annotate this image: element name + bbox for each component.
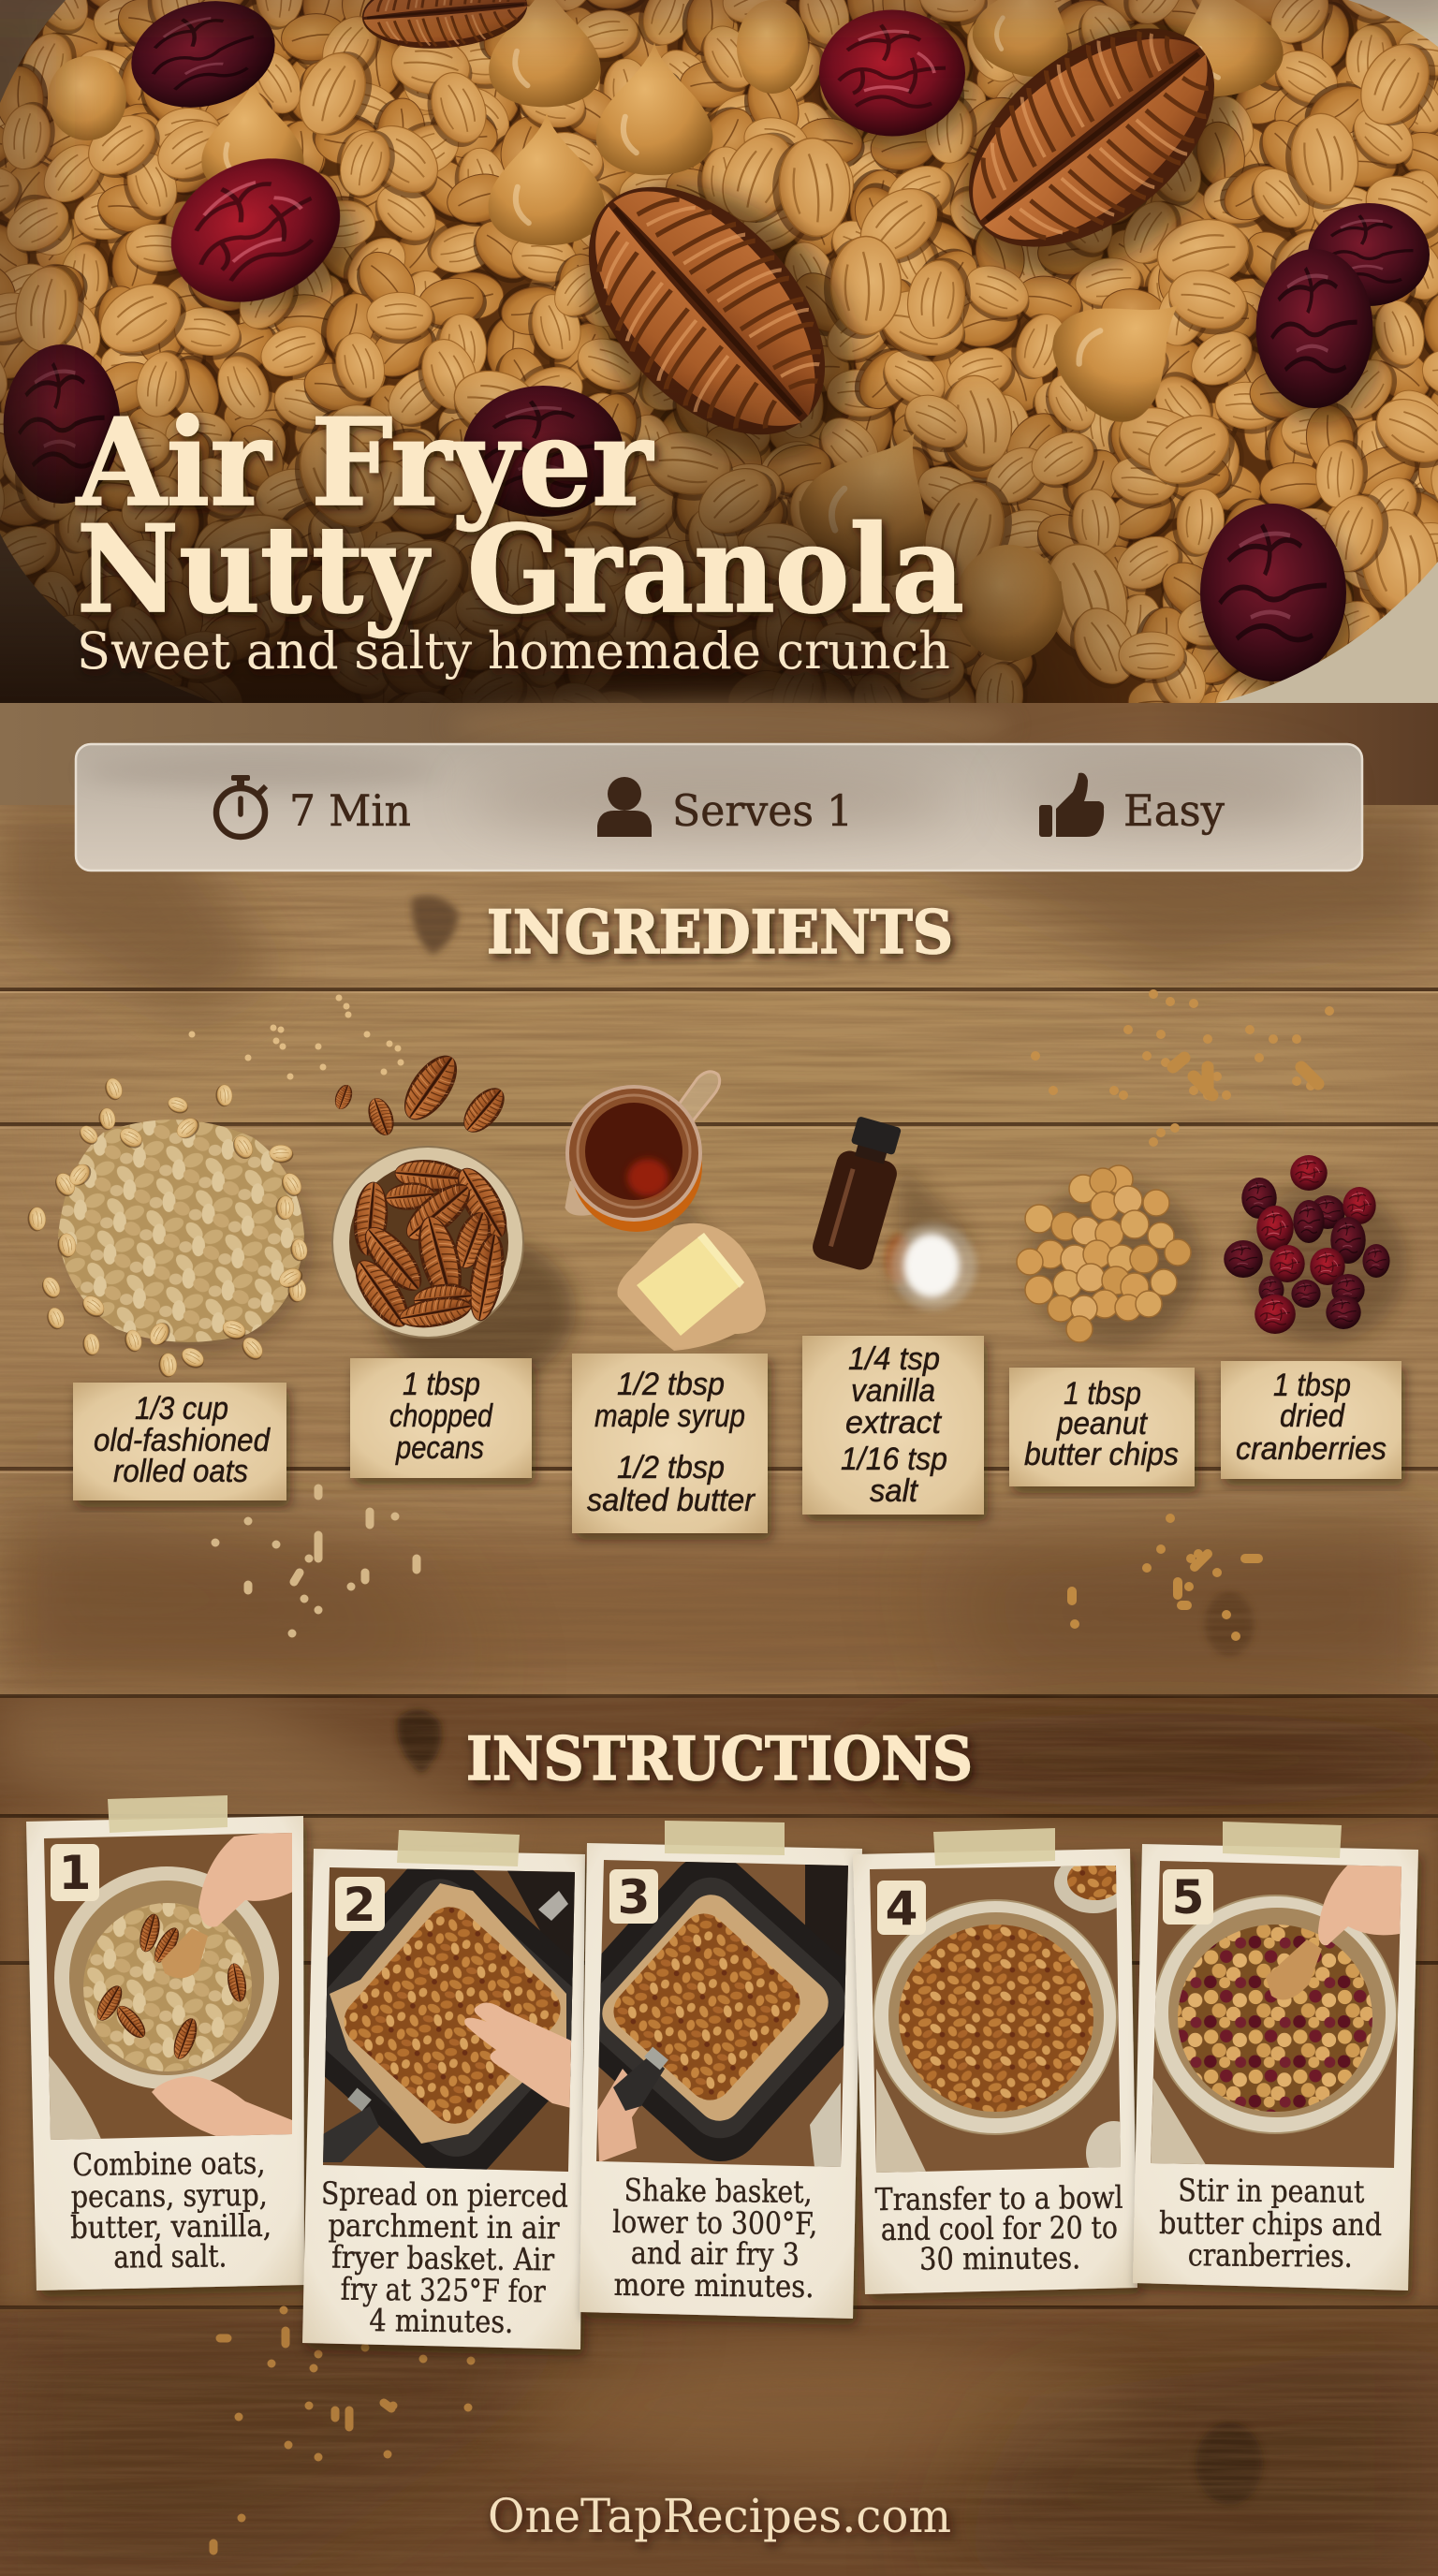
- oat bed: [0, 0, 1438, 703]
- badge: 1: 1: [59, 1846, 91, 1900]
- badge: 4: 4: [886, 1881, 917, 1936]
- ingredient: vanilla bottle: [810, 1114, 974, 1310]
- ingredient card: vanilla and salt: vanilla: [851, 1373, 935, 1409]
- step 5 text: butter chips and: [1159, 2204, 1382, 2243]
- badge: 2: 2: [344, 1878, 375, 1932]
- badge: 4: [877, 1881, 926, 1936]
- step 4 card: [853, 1828, 1142, 2294]
- ingredient card: vanilla and salt: [802, 1336, 984, 1515]
- step 3 card: [544, 1821, 887, 2319]
- ingredient card: syrup and butter: 1/2 tbsp: [617, 1450, 725, 1486]
- edge vignette: [0, 0, 1438, 524]
- step 3 text: Shake basket,: [624, 2172, 813, 2210]
- badge: 5: [1163, 1869, 1213, 1925]
- step 4 text: and cool for 20 to: [881, 2209, 1118, 2247]
- heading: instructions: INSTRUCTIONS: [466, 1724, 973, 1794]
- ingredient: peanut butter chips: [1017, 1165, 1202, 1346]
- heading: ingredients: INGREDIENTS: [487, 898, 953, 968]
- stats bar: [76, 744, 1362, 871]
- step 4 text: Transfer to a bowl: [874, 2179, 1123, 2217]
- step 1 photo: [37, 1825, 300, 2144]
- wood background: instructions: [0, 1696, 1438, 2576]
- ingredient card: vanilla and salt: 1/4 tsp: [848, 1341, 940, 1377]
- ingredient card: syrup and butter: 1/2 tbsp: [617, 1367, 725, 1402]
- step 5 photo: [1147, 1858, 1404, 2172]
- tape: [397, 1830, 520, 1866]
- blurred band: [0, 697, 1438, 805]
- badge: 5: 5: [1172, 1870, 1204, 1925]
- ingredient: rolled oats: [26, 1076, 314, 1378]
- ingredient card: oats: old-fashioned: [94, 1423, 271, 1458]
- ingredient card: peanut butter chips: peanut: [1056, 1406, 1148, 1442]
- pecans: [360, 0, 1255, 479]
- ingredient: butter: [617, 1223, 766, 1351]
- step 1 text: and salt.: [113, 2237, 227, 2276]
- ingredient: salt: [886, 1223, 976, 1310]
- title: Air Fryer: [76, 393, 654, 534]
- step 3 text: lower to 300°F,: [612, 2203, 817, 2242]
- ingredient card: pecans: 1 tbsp: [403, 1367, 480, 1402]
- ingredient card: peanut butter chips: butter chips: [1024, 1437, 1179, 1472]
- ingredient card: vanilla and salt: extract: [845, 1405, 943, 1441]
- step 1 text: Combine oats,: [72, 2144, 266, 2183]
- step 2 text: [319, 2174, 568, 2341]
- tape: [933, 1828, 1055, 1866]
- step 2 text: parchment in air: [328, 2207, 560, 2247]
- step 4 text: 30 minutes.: [919, 2239, 1080, 2277]
- icon: stopwatch: [216, 775, 266, 837]
- step 1 text: [69, 2144, 272, 2276]
- step 1 text: butter, vanilla,: [70, 2207, 271, 2246]
- step 4 text: [874, 2179, 1123, 2277]
- ingredient card: pecans: pecans: [395, 1430, 484, 1466]
- ingredient: pecan bowl: [331, 1046, 576, 1385]
- ingredient card: syrup and butter: maple syrup: [594, 1398, 745, 1434]
- footer website: OneTapRecipes.com: [488, 2489, 951, 2543]
- tape: [108, 1795, 227, 1833]
- ingredient card: oats: 1/3 cup: [135, 1391, 228, 1427]
- wood grain: [0, 805, 1438, 2576]
- badge: 3: [609, 1869, 658, 1925]
- tape: [665, 1821, 785, 1855]
- step 5 text: Stir in peanut: [1178, 2172, 1365, 2210]
- hero photo of granola: [0, 0, 1438, 703]
- step 3 text: more minutes.: [613, 2266, 814, 2305]
- step 5 card: [1133, 1822, 1418, 2291]
- ingredient card: oats: rolled oats: [113, 1454, 248, 1489]
- dark overlay behind title: [0, 374, 1438, 704]
- stat: difficulty: Easy: [1123, 785, 1225, 836]
- stat: servings: Serves 1: [672, 785, 853, 836]
- ingredient card: peanut butter chips: [1009, 1368, 1195, 1486]
- ingredient card: pecans: [350, 1358, 532, 1478]
- wood background: ingredients: [0, 805, 1438, 1696]
- ingredient card: oats: [73, 1383, 286, 1500]
- badge: 3: 3: [618, 1870, 650, 1925]
- ingredient card: cranberries: dried: [1280, 1398, 1345, 1434]
- title: Nutty Granola: [77, 500, 964, 640]
- step 3 text: [611, 2172, 818, 2305]
- step 3 photo: [544, 1837, 887, 2179]
- ingredient card: cranberries: cranberries: [1236, 1431, 1387, 1467]
- tape: [1223, 1822, 1342, 1858]
- icon: person: [597, 777, 652, 837]
- step 1 text: pecans, syrup,: [71, 2176, 268, 2215]
- step 2 text: fryer basket. Air: [331, 2239, 555, 2277]
- crumbs scattered: [192, 994, 1329, 2551]
- step 2 photo: [267, 1837, 629, 2199]
- step 5 text: cranberries.: [1188, 2236, 1353, 2275]
- step 2 text: 4 minutes.: [369, 2302, 514, 2340]
- ingredient: dried cranberries: [1224, 1155, 1407, 1343]
- cranberries: [4, 0, 1430, 681]
- warm tone overlay: [0, 0, 1438, 703]
- badge: 1: [51, 1844, 99, 1901]
- step 2 text: fry at 325°F for: [341, 2271, 546, 2309]
- ingredient card: cranberries: [1221, 1361, 1401, 1479]
- stat: time: 7 Min: [289, 785, 411, 836]
- icon: thumbs up: [1039, 773, 1104, 837]
- ingredient card: syrup and butter: [572, 1354, 768, 1533]
- ingredient card: vanilla and salt: salt: [870, 1473, 918, 1509]
- step 1 card: [26, 1795, 304, 2291]
- step 4 photo: [866, 1853, 1142, 2185]
- title: [76, 393, 964, 640]
- ingredient card: syrup and butter: salted butter: [587, 1483, 756, 1518]
- step 2 card: [267, 1830, 629, 2349]
- ingredient card: pecans: chopped: [389, 1398, 493, 1434]
- peanut butter chips: [48, 0, 1291, 661]
- ingredient card: vanilla and salt: 1/16 tsp: [841, 1442, 947, 1477]
- subtitle: Sweet and salty homemade crunch: [77, 622, 950, 681]
- ingredient card: cranberries: 1 tbsp: [1273, 1368, 1351, 1403]
- ingredient card: peanut butter chips: 1 tbsp: [1064, 1376, 1141, 1412]
- badge: 2: [335, 1877, 385, 1932]
- ingredient: maple syrup jug: [566, 1072, 758, 1348]
- step 5 text: [1159, 2172, 1383, 2275]
- step 3 text: and air fry 3: [631, 2234, 800, 2273]
- bowl rim: [0, 0, 1438, 703]
- step 2 text: Spread on pierced: [321, 2174, 568, 2215]
- foreground oats: [0, 1, 1438, 699]
- contact shadows: [169, 0, 1382, 697]
